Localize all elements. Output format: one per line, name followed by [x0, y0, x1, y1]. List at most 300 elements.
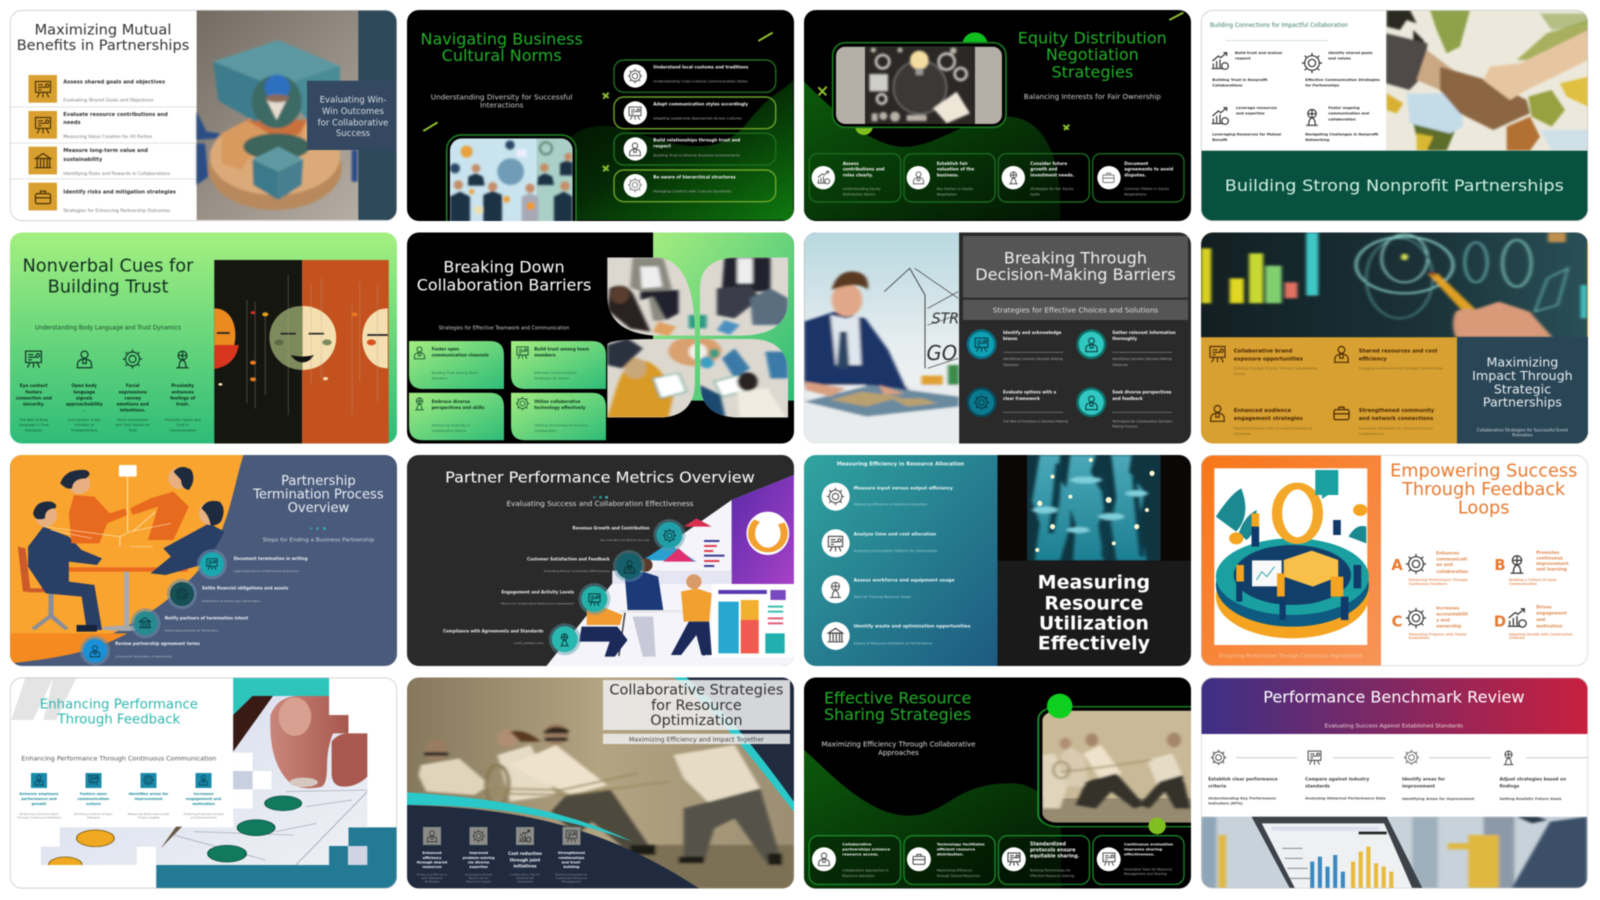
- photo: laptop dashboard: [1201, 817, 1587, 888]
- labels: Navigating Challenges in Nonprofit: [1305, 133, 1378, 137]
- labels: culture: [86, 802, 101, 806]
- cards: effectiveness.: [1124, 852, 1155, 857]
- labels: trust.: [176, 402, 190, 407]
- tiles: Members: [432, 376, 448, 380]
- subtitle: Enhancing Performance Through Continuous Communication: [21, 755, 216, 763]
- cards: through Shared Resources: [937, 874, 980, 878]
- title panel: Collaborative Strategies for Successful Event: [1477, 427, 1568, 432]
- list cards: Be aware of hierarchical structures: [653, 174, 736, 179]
- labels: improvement: [135, 797, 163, 801]
- title block: Decision-Making Barriers: [975, 265, 1176, 284]
- title: Effective Resource: [824, 688, 971, 707]
- letters: B: [1494, 557, 1506, 574]
- sub labels: The Role of Emotions in Decision-Making: [1002, 419, 1068, 423]
- sub labels: Measuring Efficiency in Resource Allocation: [854, 503, 927, 507]
- title: Collaboration Barriers: [417, 276, 591, 295]
- metric labels: Compliance with Agreements and Standards: [443, 628, 544, 633]
- labels: Analyze time and cost allocation: [854, 532, 936, 538]
- labels: through shared: [417, 861, 448, 865]
- labels: Collaborations: [1212, 83, 1243, 87]
- sub labels: Criticism: [1509, 636, 1525, 640]
- sub labels: Indicators (KPIs): [1208, 801, 1243, 805]
- cards: Understanding Equity: [843, 187, 881, 191]
- title: Benefits in Partnerships: [17, 37, 189, 54]
- cards: growth and: [1030, 167, 1057, 172]
- callout: win-win: [307, 81, 399, 150]
- cards: roles clearly.: [843, 172, 873, 177]
- title block: [963, 236, 1188, 298]
- labels: Proximity: [171, 383, 194, 388]
- sub labels: Dialogue: [87, 816, 100, 820]
- sub labels: and Their Impact on: [116, 423, 150, 427]
- tiles: Building Trust Among Team: [432, 371, 478, 375]
- tiles: Utilize collaborative: [534, 399, 581, 404]
- title panel: Impact Through: [1472, 368, 1573, 383]
- title: Sharing Strategies: [824, 705, 971, 724]
- photo: glass bottles: [1027, 455, 1161, 561]
- labels: and feedback: [1112, 396, 1143, 401]
- title: Through Feedback: [57, 712, 181, 727]
- title: Measuring: [1038, 572, 1150, 594]
- list text: Identifying Risks and Rewards in Collaborations: [63, 171, 171, 177]
- step sub labels: Distribution of Assets Upon Termination: [202, 599, 260, 603]
- labels: Adjust strategies based on: [1500, 777, 1566, 783]
- panel: resource sharing: [804, 678, 1212, 888]
- photo: fingers on survey form: [11, 677, 397, 888]
- labels: accountabilit: [1436, 611, 1468, 617]
- sub labels: Trustworthiness: [70, 429, 98, 433]
- sub labels: Language in Trust: [19, 423, 49, 427]
- labels: Drives: [1536, 605, 1552, 611]
- cards: distribution.: [937, 852, 964, 857]
- labels: Shared resources and cost: [1359, 349, 1438, 355]
- labels: efficiency: [1359, 357, 1387, 363]
- list cards: Build relationships through trust and: [653, 138, 740, 143]
- list cards: Building Trust in Diverse Business Environments: [653, 153, 740, 157]
- cards: investment needs.: [1030, 172, 1075, 177]
- photo: businessman: STR: [932, 309, 959, 327]
- labels: Enhanced audience: [1234, 408, 1292, 414]
- cards: Continuous evaluation: [1124, 842, 1174, 847]
- labels: efficiency: [423, 856, 442, 860]
- title: Building Strong Nonprofit Partnerships: [1225, 176, 1564, 195]
- sub labels: Management: [562, 880, 582, 884]
- metric sub labels: Metrics for Collaborative Performance Assessment: [501, 602, 575, 606]
- photo: strategy board: [833, 43, 1006, 127]
- sub labels: Identifying Areas for Improvement: [1402, 797, 1474, 801]
- title box: for Resource: [651, 698, 742, 714]
- list text: Assess shared goals and objectives: [63, 79, 165, 85]
- sub labels: Building Stronger Brands Through Collaborative: [1234, 366, 1317, 370]
- labels: Identify and acknowledge: [1003, 330, 1062, 335]
- labels: Strengthened community: [1359, 408, 1435, 414]
- cards: Consider future: [1030, 161, 1067, 166]
- labels: Collaborative brand: [1234, 349, 1293, 355]
- title: Effectively: [1038, 632, 1151, 654]
- cards: Negotiations: [1124, 193, 1147, 197]
- list text: [63, 79, 176, 214]
- list cards: [614, 60, 776, 202]
- sub labels: Operations: [517, 880, 533, 884]
- timeline icons: [1211, 750, 1588, 765]
- subtitle box: [603, 734, 790, 744]
- title: Cultural Norms: [442, 46, 562, 65]
- panel: navigating cultural norms: [407, 10, 794, 242]
- cards: Distribution Basics: [843, 193, 875, 197]
- icons: [1406, 554, 1526, 628]
- subtitle: Balancing Interests for Fair Ownership: [1024, 92, 1161, 101]
- metric sub labels: Evaluating Partner Contribution Effectiveness: [544, 569, 610, 573]
- labels: expertise: [469, 865, 489, 869]
- labels: language: [73, 389, 95, 394]
- dots: [593, 496, 608, 499]
- sub labels: Building a Culture of Open: [1509, 578, 1557, 582]
- icons: [31, 773, 212, 788]
- tiles: Embracing Diversity in: [432, 423, 470, 427]
- tiles: technology effectively: [534, 405, 586, 410]
- sub labels: Formation: [25, 429, 42, 433]
- sub labels: Facial Expressions: [117, 418, 148, 422]
- labels: collaboration: [1328, 117, 1356, 121]
- list text: Measure long-term value and: [63, 148, 148, 154]
- labels: Measure input versus output efficiency: [854, 485, 953, 491]
- panel: collaborative strategies: [407, 677, 794, 888]
- sub labels: Communication: [169, 429, 196, 433]
- labels: problem-solving: [463, 856, 495, 860]
- title box: Optimization: [650, 713, 743, 729]
- cards: Standardized: [1030, 842, 1067, 848]
- labels: y and: [1436, 617, 1450, 623]
- subtitle block: Strategies for Effective Choices and Solutions: [993, 305, 1158, 314]
- header band: Evaluating Success Against Established Standards: [1325, 723, 1463, 729]
- photo: tug of war: [407, 677, 794, 888]
- cards: Maximizing Efficiency: [937, 868, 972, 872]
- step labels: Document termination in writing: [234, 556, 308, 561]
- photo: tug of war: [1038, 707, 1212, 827]
- title panel: Maximizing: [1486, 354, 1558, 369]
- panel: decision making barriers: [804, 232, 1191, 446]
- sub labels: Building Synergies for: [556, 872, 588, 876]
- labels: Identify areas for: [1402, 777, 1446, 783]
- labels: thoroughly: [1112, 336, 1137, 341]
- sub labels: Analyzing Consumption Patterns for Optimization: [854, 549, 937, 553]
- labels: feelings of: [170, 395, 195, 400]
- cards: Building Partnerships for: [1030, 868, 1071, 872]
- metric labels: Engagement and Activity Levels: [501, 589, 575, 594]
- labels: improvement: [1402, 783, 1435, 789]
- subtitle block: [963, 300, 1188, 320]
- labels: and values: [1328, 56, 1352, 60]
- labels: standards: [1305, 783, 1330, 789]
- labels: Fosters open: [80, 792, 107, 796]
- labels: approachability: [66, 402, 103, 407]
- title: Empowering Success: [1390, 462, 1577, 482]
- labels: relationships: [559, 856, 584, 860]
- photo: handshake over map: [1386, 10, 1588, 151]
- title: Loops: [1458, 498, 1510, 518]
- sub labels: Trust: [128, 429, 137, 433]
- sub labels: Sustainable Resource: [556, 876, 587, 880]
- labels: Effective Communication Strategies: [1305, 78, 1381, 82]
- tiles: Collaboration: [534, 429, 557, 433]
- cards: valuation of the: [937, 167, 974, 172]
- sub labels: Proximity: Space and: [165, 418, 200, 422]
- labels: Identify shared goals: [1328, 51, 1373, 55]
- photo: team circle: [607, 232, 794, 418]
- labels: Establish clear performance: [1208, 777, 1278, 783]
- title: Through Feedback: [1401, 480, 1566, 500]
- cards: Key Factors in Equity: [937, 187, 973, 191]
- sub labels: Adapting Growth with Constructive: [1509, 632, 1572, 636]
- subtitle: Understanding Diversity for Successful: [431, 92, 573, 101]
- labels: Benefit: [1212, 138, 1227, 142]
- cards: Resource Allocation: [842, 874, 875, 878]
- cards: Innovative Tools for Resource: [1124, 868, 1172, 872]
- labels: Building Trust in Nonprofit: [1212, 78, 1268, 82]
- sub labels: Impact of Resource Utilization on Performance: [854, 641, 932, 645]
- title: Termination Process: [252, 487, 384, 502]
- title box: Collaborative Strategies: [609, 682, 783, 698]
- cards: business.: [937, 172, 959, 177]
- letters: A: [1391, 557, 1403, 574]
- title: Negotiation: [1046, 45, 1139, 64]
- cards: resource access.: [842, 852, 879, 857]
- icon circles: [822, 483, 850, 650]
- sub labels: Eye Contact: A Key: [68, 418, 100, 422]
- cards: Management and Sharing: [1124, 872, 1167, 876]
- callout: win-win: Success: [336, 129, 371, 139]
- cards: efficient resource: [937, 847, 975, 852]
- cards: Splits: [1030, 193, 1040, 197]
- subtitle: Understanding Body Language and Trust Dynamics: [35, 325, 181, 331]
- tiles: Collaborative Efforts: [432, 429, 466, 433]
- cards: Strategies for Fair Equity: [1030, 187, 1074, 191]
- labels: Networking: [1305, 138, 1330, 142]
- tiles: Embrace diverse: [432, 399, 470, 404]
- labels: exposure opportunities: [1234, 357, 1303, 363]
- sub labels: and Development: [191, 816, 217, 820]
- labels: Build trust and mutual: [1235, 51, 1282, 55]
- labels: Foster ongoing: [1328, 106, 1360, 110]
- sub labels: Identifying Common Decision-Making: [1003, 357, 1063, 361]
- title: Strategies: [1051, 62, 1133, 81]
- step labels: Review partnership agreement terms: [115, 641, 200, 646]
- bottom caption: Enhancing Performance Through Continuous Improvement: [1219, 654, 1363, 660]
- callout: win-win: for Collaborative: [318, 118, 388, 128]
- panel: measuring resource use: [804, 455, 1192, 667]
- list cards: Adapt communication styles accordingly: [653, 101, 748, 106]
- sub labels: Initiatives: [1234, 432, 1251, 436]
- list cards: Adapting Leadership Approaches Across Cultures: [653, 116, 742, 120]
- band: [1201, 151, 1588, 222]
- sub labels: Trust in: [176, 423, 189, 427]
- label: cost reduction: Cost reduction: [508, 851, 542, 856]
- labels: Open body: [71, 383, 97, 388]
- title: Resource: [1044, 592, 1143, 614]
- cards: Collaborative: [842, 842, 872, 847]
- labels: collaboration: [1436, 569, 1468, 575]
- title: Breaking Down: [443, 257, 565, 276]
- cards: Document: [1124, 161, 1148, 166]
- labels: Leverage resources: [1236, 106, 1278, 110]
- step sub labels: Legal Implications of Partnership Dissolution: [234, 569, 299, 573]
- metric sub labels: Audit_sublabel_here: [514, 641, 544, 645]
- sub labels: Identifying Common Decision-Making: [1112, 357, 1172, 361]
- tiles: members: [534, 353, 556, 358]
- labels: Leveraging Resources for Mutual: [1212, 133, 1281, 137]
- header: Building Connections for Impactful Collaboration: [1210, 23, 1348, 29]
- labels: Gather relevant information: [1112, 330, 1176, 335]
- title: Navigating Business: [421, 29, 583, 48]
- subtitle: Strategies for Effective Teamwork and Communication: [439, 325, 569, 331]
- subtitle: Maximizing Efficiency Through Collaborative: [821, 741, 976, 749]
- sub labels: Collaborations: [1359, 432, 1384, 436]
- sub labels: Timely Insights: [137, 816, 160, 820]
- labels: Increases: [194, 792, 214, 796]
- sub labels: Tools for Tracking Resource Usage: [853, 595, 911, 599]
- labels: Compare against industry: [1305, 777, 1369, 783]
- labels: via diverse: [468, 861, 490, 865]
- labels: expressions: [119, 389, 147, 394]
- sub labels: The Role of Body: [18, 418, 48, 422]
- cards: contributions and: [843, 167, 885, 172]
- cards: disputes.: [1124, 172, 1147, 177]
- cards: Common Pitfalls in Equity: [1124, 187, 1169, 191]
- panel: feedback loops: [1201, 455, 1588, 666]
- sub labels: Fostering Employee Growth: [184, 812, 224, 816]
- step labels: Settle financial obligations and assets: [202, 586, 289, 591]
- labels: Eye contact: [20, 383, 47, 388]
- sub labels: Making Success: [1112, 425, 1138, 429]
- panel: performance metrics: [407, 455, 794, 667]
- labels: intentions.: [120, 408, 146, 413]
- subtitle: Steps for Ending a Business Partnership: [263, 538, 375, 544]
- labels: Strengthened: [558, 851, 585, 855]
- cards: protocols ensure: [1030, 848, 1076, 854]
- labels: convey: [124, 395, 141, 400]
- panel: benchmark review: [1201, 678, 1588, 888]
- labels: motivation: [1536, 624, 1562, 630]
- labels: Enhance employee: [19, 792, 59, 796]
- sub labels: Enhancing Efficiency: [417, 872, 447, 876]
- cards: [809, 836, 1184, 884]
- labels: building: [563, 865, 580, 869]
- labels: sincerity.: [23, 402, 45, 407]
- illustration: meeting at table: [10, 455, 243, 663]
- title box: [603, 680, 790, 730]
- illustration: analytics team: [546, 475, 794, 667]
- subtitle: Evaluating Success and Collaboration Effectiveness: [506, 499, 694, 508]
- panel: enhancing performance: [10, 677, 397, 888]
- cards: agreements to avoid: [1124, 167, 1173, 172]
- sub labels: Streamlined: [516, 876, 534, 880]
- title: Partnership: [281, 474, 356, 489]
- tiles: communication channels: [432, 353, 489, 358]
- labels: improvement: [1536, 561, 1569, 567]
- panel: termination process: [10, 455, 397, 666]
- letters: D: [1494, 614, 1506, 631]
- labels: growth: [32, 802, 47, 806]
- metric labels: Customer Satisfaction and Feedback: [527, 557, 610, 562]
- metric sub labels: Key Indicators for Partner Success: [600, 538, 650, 542]
- cards: equitable sharing.: [1030, 854, 1080, 860]
- header band: [1201, 678, 1588, 734]
- labels: .: [83, 408, 85, 413]
- photo: diverse team: [445, 134, 578, 222]
- labels: communication: [78, 797, 110, 801]
- labels: engagement strategies: [1234, 416, 1303, 422]
- sub labels: Enhancing Communication: [20, 812, 59, 816]
- labels: Identify waste and optimization opportunities: [854, 624, 971, 630]
- panel: nonprofit partnerships: [1201, 10, 1588, 222]
- sub labels: Indicator of: [75, 423, 95, 427]
- illustration: feedback platform: [1216, 470, 1369, 638]
- labels: Evaluate options with a: [1003, 390, 1056, 395]
- step sub labels: Grounds for Termination of Partnership: [115, 654, 172, 658]
- tiles: perspectives and skills: [432, 405, 485, 410]
- step sub labels: Notice Requirements for Termination: [165, 629, 219, 633]
- callout: win-win: Win Outcomes: [322, 107, 385, 117]
- title block: Breaking Through: [1004, 248, 1147, 267]
- sub labels: Analyzing Historical Performance Data: [1305, 796, 1386, 800]
- title: Utilization: [1039, 612, 1149, 634]
- labels: for Partnerships: [1305, 83, 1340, 87]
- icons: [1212, 53, 1322, 125]
- sub labels: Engaging Audiences with Strategic Partnerships: [1359, 366, 1443, 370]
- cards: Collaborative Approaches in: [842, 868, 889, 872]
- labels: Facial: [126, 383, 140, 388]
- tiles: Effective Communication: [534, 371, 577, 375]
- tiles: Foster open: [432, 347, 459, 352]
- sub labels: Obstacles: [1003, 363, 1019, 367]
- title panel: [1457, 337, 1588, 444]
- photo: building blocks: [197, 10, 397, 220]
- sub labels: Maximizing Reach with Co-Hosted Marketing: [1234, 427, 1312, 431]
- panel: strategic partnerships: [1201, 232, 1588, 444]
- title panel: Strategic: [1494, 381, 1551, 396]
- panel: nonverbal cues: [10, 232, 397, 447]
- sub labels: Innovative Strategies for Successful Event: [1359, 427, 1433, 431]
- labels: and: [1536, 617, 1545, 623]
- tiles: Utilizing Technology to Enhance: [534, 423, 588, 427]
- sub labels: Enhancing Performance Through: [1409, 578, 1468, 582]
- list text: Strategies for Enhancing Partnership Outcomes: [63, 208, 171, 214]
- step labels: Notify partners of termination intent: [165, 616, 248, 621]
- labels: biases: [1003, 336, 1018, 341]
- labels: signals: [76, 395, 93, 400]
- sub labels: Setting Realistic Future Goals: [1500, 797, 1562, 801]
- labels: and learning: [1536, 567, 1567, 573]
- labels: criteria: [1208, 783, 1226, 789]
- title: Building Trust: [48, 277, 168, 298]
- title panel: Promotion: [1512, 432, 1533, 437]
- sub labels: Continuous Feedback: [1409, 582, 1448, 586]
- labels: ownership: [1436, 624, 1461, 630]
- tiles: [409, 341, 606, 440]
- callout: win-win: Evaluating Win-: [320, 96, 386, 106]
- sub labels: Understanding Key Performance: [1208, 796, 1276, 800]
- labels: Seek diverse perspectives: [1112, 390, 1172, 395]
- list cards: Understand local customs and traditions: [653, 64, 749, 69]
- labels: Enhances: [1436, 551, 1460, 557]
- list text: sustainability: [63, 157, 103, 163]
- cards: Establish fair: [937, 161, 969, 166]
- sub labels: Measuring Performance with: [128, 812, 169, 816]
- labels: and network connections: [1359, 416, 1433, 422]
- labels: communication and: [1328, 112, 1369, 116]
- label: cost reduction: initiatives: [513, 864, 537, 869]
- labels: performance and: [21, 797, 57, 801]
